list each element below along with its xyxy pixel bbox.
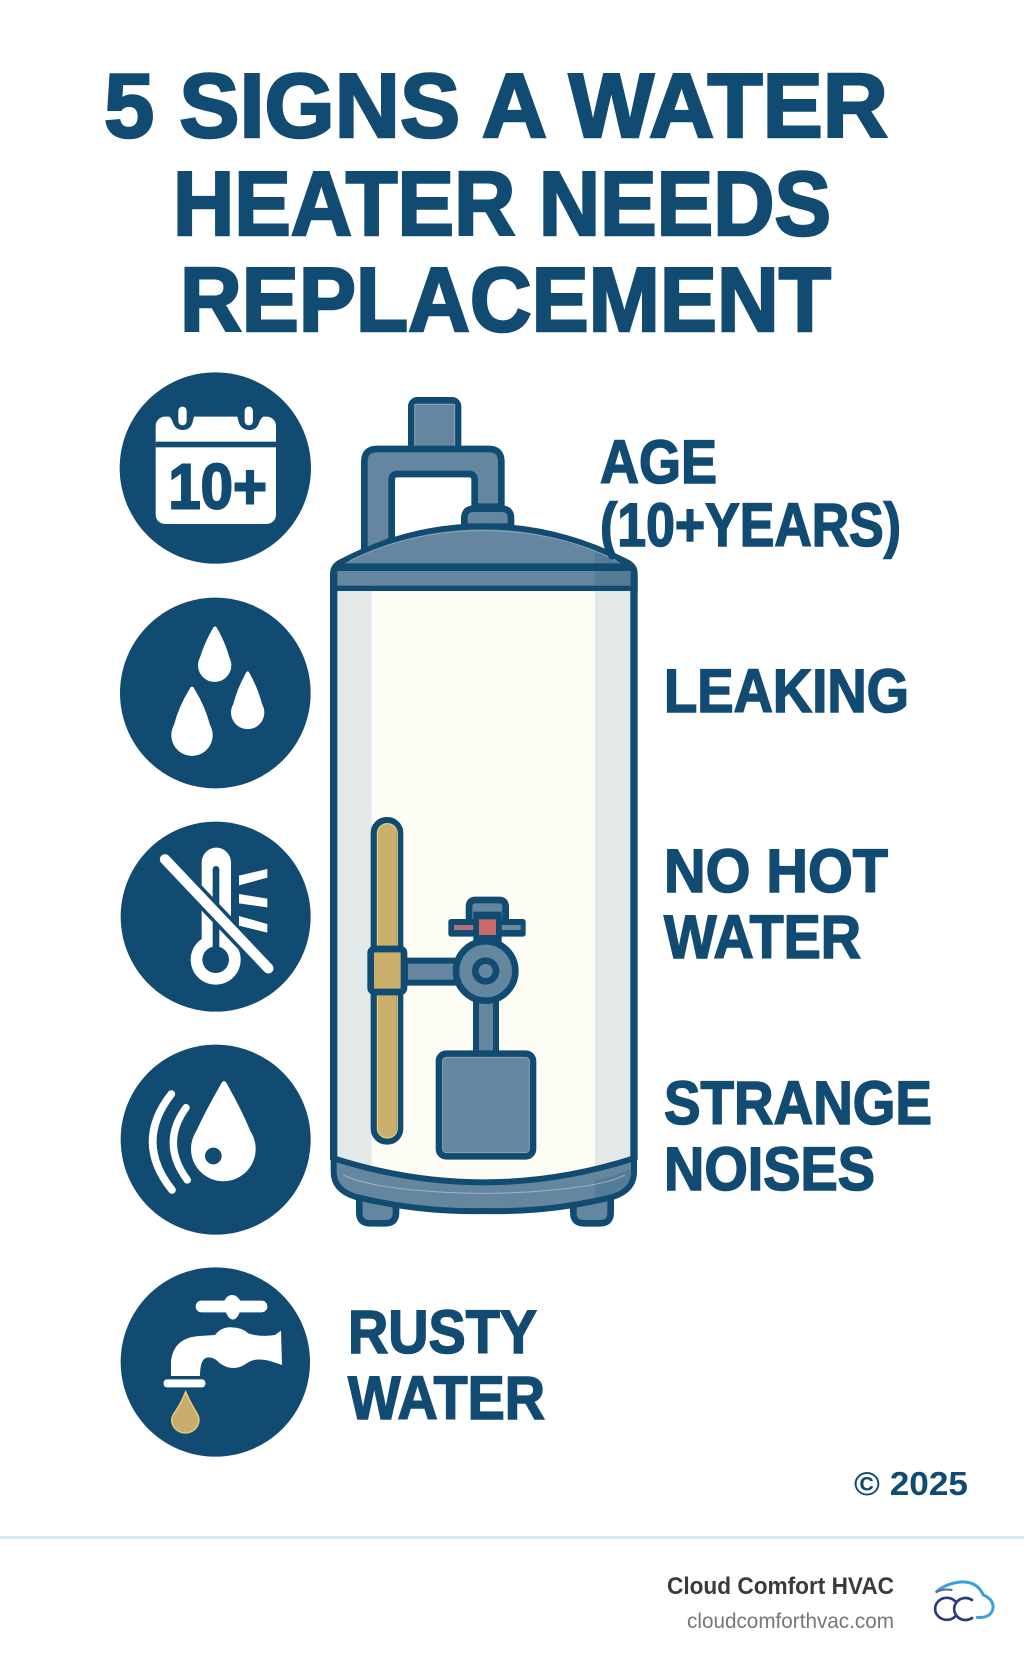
label: rusty water: WATER bbox=[348, 1364, 545, 1432]
gas control box bbox=[439, 1054, 533, 1156]
label: age: (10+YEARS) bbox=[600, 491, 901, 559]
arm pipe bbox=[405, 961, 457, 983]
base bbox=[334, 1158, 634, 1211]
water heater illustration bbox=[330, 400, 638, 1223]
icon: crossed-out thermometer bbox=[121, 822, 311, 1012]
tank body bbox=[337, 589, 631, 1182]
title bbox=[104, 56, 888, 351]
title: 5 SIGNS A WATER bbox=[104, 56, 888, 157]
footer brand name: Cloud Comfort HVAC bbox=[667, 1573, 894, 1600]
title: HEATER NEEDS bbox=[173, 154, 831, 255]
label: rusty water bbox=[348, 1298, 545, 1432]
label: no hot water bbox=[664, 837, 888, 971]
copyright: © 2025 bbox=[854, 1465, 968, 1502]
title: REPLACEMENT bbox=[180, 250, 831, 351]
logo: cloud bbox=[935, 1582, 993, 1620]
vent bbox=[411, 400, 458, 450]
tank side shading bbox=[337, 591, 631, 1170]
label: strange noises: STRANGE bbox=[664, 1069, 932, 1137]
label: rusty water: RUSTY bbox=[348, 1298, 537, 1366]
label: strange noises: NOISES bbox=[664, 1135, 875, 1203]
label: no hot water: NO HOT bbox=[664, 837, 888, 905]
valve circle bbox=[456, 941, 515, 1001]
icon: calendar 10+: 10+ bbox=[168, 451, 267, 523]
feet bbox=[359, 1187, 611, 1223]
tank side walls bbox=[334, 577, 634, 1160]
icon: water drops bbox=[120, 598, 311, 788]
flue pipe bbox=[364, 449, 501, 553]
label: strange noises bbox=[664, 1069, 932, 1203]
valve cap bbox=[469, 900, 506, 927]
icon: faucet with rusty drip bbox=[121, 1267, 310, 1457]
label: leaking: LEAKING bbox=[664, 657, 909, 725]
rod bracket bbox=[371, 949, 404, 992]
footer divider bbox=[0, 1536, 1024, 1539]
label: age: AGE bbox=[600, 428, 717, 496]
dome lid and band bbox=[330, 523, 638, 591]
top fitting bbox=[464, 509, 511, 527]
valve handle bbox=[448, 919, 526, 937]
icon: drop with noise waves bbox=[121, 1045, 311, 1235]
footer website: cloudcomforthvac.com bbox=[687, 1610, 894, 1633]
anode rod bbox=[374, 820, 400, 1141]
lower pipe bbox=[476, 1000, 496, 1053]
red valve indicator bbox=[479, 919, 496, 935]
icon: calendar 10+ bbox=[120, 372, 311, 564]
label: no hot water: WATER bbox=[664, 903, 861, 971]
label: age bbox=[600, 428, 901, 559]
